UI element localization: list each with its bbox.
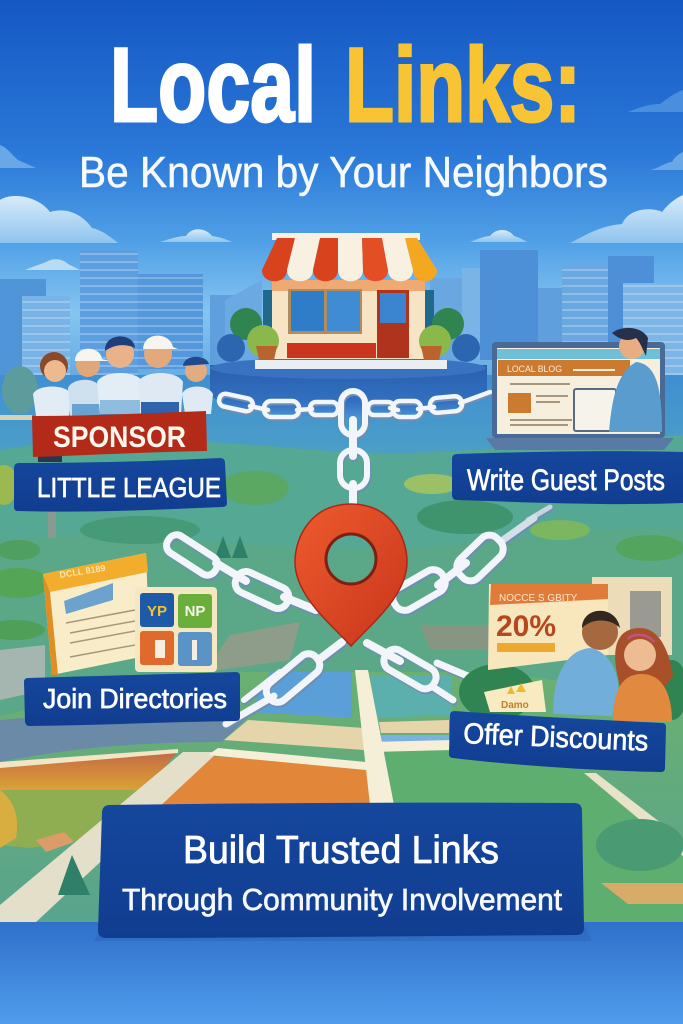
chains (163, 391, 550, 724)
coupon 20 percent: NOCCE S GBITY (499, 593, 578, 604)
bottom line 1: Build Trusted Links (183, 829, 499, 872)
bottom water band (0, 922, 683, 1024)
shop window (288, 289, 362, 334)
chain: vertical (340, 391, 367, 505)
coupon stars (484, 680, 546, 712)
banner: sponsor: SPONSOR (53, 421, 186, 454)
icon: laptop with blog (486, 328, 674, 450)
background sky (0, 0, 683, 400)
banner: write guest posts (452, 451, 683, 504)
woman (613, 628, 673, 722)
chain: upper right (389, 507, 550, 614)
chain: lower left (226, 642, 342, 724)
title word: Links: Links: (345, 27, 581, 144)
directory: DCLL 8189 (59, 563, 106, 580)
directory tiles: NP (185, 603, 205, 620)
blog header (498, 360, 630, 376)
kid 1 (33, 352, 71, 462)
kid 3 (97, 336, 143, 414)
man (553, 611, 620, 716)
chain: upper left (163, 531, 316, 612)
icon: directory books (43, 553, 217, 675)
icon: map pin (295, 504, 407, 646)
directory tiles: YP (147, 603, 167, 620)
bottom banner (94, 803, 592, 941)
chain: store to little league (218, 393, 338, 417)
awning (262, 233, 437, 281)
coupon 20 percent (488, 584, 608, 670)
banner: sponsor (32, 411, 207, 457)
directory (43, 553, 150, 675)
city skyline (0, 250, 683, 380)
neighborhood map (0, 645, 683, 923)
banner: offer discounts (449, 711, 666, 772)
discount scene (459, 577, 683, 722)
book (592, 577, 672, 655)
planter right (419, 308, 480, 362)
landscape ground (0, 366, 683, 725)
icon: storefront (217, 233, 480, 362)
chain: lower right (367, 643, 470, 700)
kid 5 (182, 357, 213, 414)
banner: little league: LITTLE LEAGUE (37, 472, 221, 503)
coupon 20 percent: 20% (496, 610, 556, 643)
banner: offer discounts: Offer Discounts (463, 718, 649, 758)
blog header: LOCAL BLOG (507, 364, 562, 375)
title word: Local: Local (110, 27, 316, 144)
directory tiles (135, 587, 217, 672)
team of kids (33, 336, 213, 462)
title (79, 27, 608, 197)
kid 2 (68, 349, 110, 416)
banner: little league (14, 458, 227, 512)
kid 4 (138, 336, 183, 414)
chain: store to guest posts (368, 392, 490, 417)
man (609, 328, 662, 432)
planter left (217, 308, 279, 362)
shop door (377, 290, 409, 358)
coupon stars: Damo (501, 700, 529, 711)
banner: join directories: Join Directories (43, 683, 227, 714)
platform (210, 357, 487, 418)
bottom line 2: Through Community Involvement (122, 882, 562, 917)
subtitle: Be Known by Your Neighbors (79, 148, 608, 197)
banner: join directories (24, 672, 240, 726)
